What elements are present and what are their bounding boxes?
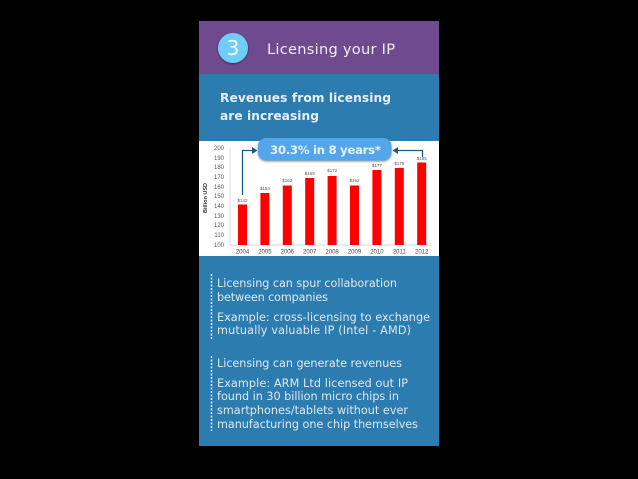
chart axis labels: 110	[214, 233, 225, 239]
chart axis labels: 160	[214, 185, 225, 191]
text block: revenues: smartphones/tablets without ever	[217, 404, 408, 417]
chart axis labels: 120	[214, 223, 225, 229]
text block: revenues	[212, 356, 418, 431]
chart axis labels: 140	[214, 204, 225, 210]
heading: revenues from licensing: Revenues from licensing	[220, 91, 391, 105]
text block: revenues: found in 30 billion micro chips in	[217, 390, 399, 403]
arrow: right, from 2012 to callout	[392, 147, 422, 157]
bar value labels: $154	[260, 186, 270, 191]
chart axis labels: 200	[214, 146, 225, 152]
year labels: 2011	[393, 250, 406, 256]
year labels: 2007	[303, 250, 317, 256]
icon: number badge	[218, 33, 248, 63]
heading: revenues from licensing: are increasing	[220, 109, 319, 123]
callout: growth	[258, 138, 392, 160]
chart axis labels: 100	[214, 243, 225, 249]
panel: content background	[199, 74, 439, 446]
axis title: Billion USD	[203, 183, 209, 213]
year labels: 2004	[236, 250, 250, 256]
text block: revenues: Example: ARM Ltd licensed out IP	[217, 377, 408, 390]
bar value labels: $162	[349, 178, 360, 183]
year labels: 2009	[348, 250, 362, 256]
chart axis labels	[214, 146, 225, 249]
year labels: 2012	[415, 250, 429, 256]
text block: collaboration: Licensing can spur collaboration	[217, 277, 397, 290]
bar value labels: $172	[327, 168, 338, 173]
icon: number badge: 3	[227, 36, 239, 60]
panel: header	[199, 21, 439, 74]
bar value labels: $142	[237, 198, 248, 203]
bar value labels: $169	[305, 171, 315, 176]
heading: revenues from licensing	[220, 91, 391, 123]
year labels: 2008	[325, 250, 339, 256]
chart axis labels: 180	[214, 165, 225, 171]
chart axis labels: 130	[214, 214, 225, 220]
text block: collaboration: Example: cross-licensing to exchange	[217, 311, 430, 324]
chart axis labels: 190	[214, 156, 225, 162]
bar value labels: $162	[282, 178, 293, 183]
chart axis labels: 150	[214, 194, 225, 200]
year labels: 2005	[258, 250, 272, 256]
heading: section title: Licensing your IP	[267, 41, 395, 58]
text block: revenues: manufacturing one chip themselves	[217, 418, 418, 431]
bar value labels	[237, 156, 427, 203]
panel: bar chart	[199, 141, 439, 256]
bar value labels: $185	[417, 156, 427, 161]
chart axis labels: 170	[214, 175, 225, 181]
bar value labels: $177	[372, 163, 382, 168]
text block: collaboration: mutually valuable IP (Intel - AMD)	[217, 324, 411, 337]
year labels	[236, 250, 429, 256]
arrow: left, from 2004 to callout	[242, 147, 258, 195]
text block: collaboration: between companies	[217, 291, 328, 304]
text block: collaboration	[212, 274, 430, 339]
axis lines	[230, 148, 431, 245]
text block: revenues: Licensing can generate revenues	[217, 357, 402, 370]
year labels: 2006	[281, 250, 295, 256]
bars	[238, 162, 426, 245]
bar value labels: $179	[394, 161, 405, 166]
callout: growth: 30.3% in 8 years*	[270, 143, 381, 157]
year labels: 2010	[370, 250, 384, 256]
